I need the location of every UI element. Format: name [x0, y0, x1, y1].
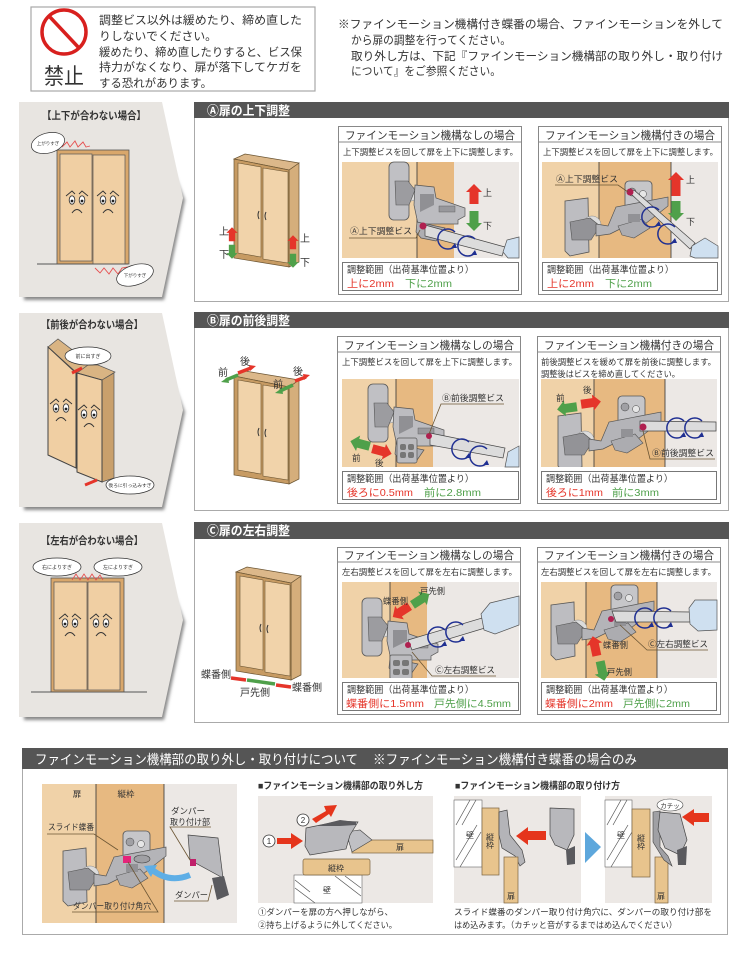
door illustration: 右によりすぎ — [42, 564, 72, 571]
hinge illustration: 前 — [352, 453, 361, 463]
removal caption: ②持ち上げるように外してください。 — [258, 920, 397, 930]
removal illustration: 1 — [267, 837, 272, 846]
range box — [542, 262, 718, 290]
door illustration: 上がりすぎ — [37, 140, 60, 147]
hinge overview illustration: スライド蝶番 — [48, 822, 94, 832]
hinge illustration: Ⓐ上下調整ビス — [350, 226, 412, 236]
hinge illustration: Ⓒ左右調整ビス — [435, 665, 495, 675]
sub-panel: with mechanism: ファインモーション機構付きの場合 — [544, 339, 714, 352]
sub-panel: with mechanism: ファインモーション機構付きの場合 — [545, 129, 715, 142]
warning text: する恐れがあります。 — [99, 76, 212, 90]
hinge illustration — [342, 162, 519, 258]
range box: 下に2mm — [405, 278, 452, 290]
attachment illustration 1 — [454, 796, 581, 903]
sub-panel: without mechanism — [337, 548, 521, 714]
attachment illustration 2: 扉 — [657, 892, 665, 901]
range box: 蝶番側に2mm — [545, 697, 613, 710]
hinge illustration: Ⓒ左右調整ビス — [648, 639, 708, 649]
panel: adjustment C — [194, 522, 729, 722]
hinge overview illustration: 取り付け部 — [170, 817, 210, 827]
attachment illustration 2: 縦枠 — [636, 833, 646, 851]
warning box — [31, 7, 315, 91]
warning text: 調整ビス以外は緩めたり、締め直した — [99, 13, 302, 27]
panel: removal and attachment — [22, 748, 728, 934]
removal subheading: ■ファインモーション機構部の取り外し方 — [258, 780, 423, 792]
warning text — [99, 13, 302, 90]
range box: 調整範囲（出荷基準位置より） — [546, 684, 673, 696]
door illustration: 下がりすぎ — [124, 272, 147, 279]
attachment illustration 1: 扉 — [507, 892, 515, 901]
attachment illustration 2: 壁 — [617, 830, 625, 840]
sub-panel: with mechanism — [538, 126, 722, 294]
range box: 後ろに1mm — [546, 486, 603, 499]
door illustration — [48, 339, 154, 494]
hinge illustration — [342, 379, 519, 468]
range box: 調整範囲（出荷基準位置より） — [546, 473, 673, 485]
attachment caption — [454, 907, 712, 930]
removal illustration — [258, 796, 433, 903]
range box: 蝶番側に1.5mm — [346, 697, 424, 710]
removal illustration: 扉 — [396, 843, 404, 852]
panel: adjustment B — [194, 312, 729, 510]
cabinet with arrows: 下 — [300, 258, 310, 269]
hinge overview illustration — [42, 784, 237, 923]
hinge illustration — [342, 582, 519, 679]
hinge illustration: 下 — [686, 217, 695, 227]
removal caption — [258, 907, 397, 930]
heading B: Ⓑ扉の前後調整 — [207, 313, 290, 328]
sub-panel: with mechanism — [537, 336, 721, 504]
hinge illustration: 下 — [483, 221, 492, 231]
sub-panel: with mechanism: 調整後はビスを締め直してください。 — [541, 369, 680, 379]
hinge illustration: 前 — [556, 393, 565, 403]
sub-panel: with mechanism: 前後調整ビスを緩めて扉を前後に調整します。 — [541, 357, 716, 367]
attachment illustration 1: 縦枠 — [486, 832, 494, 850]
sub-panel: without mechanism: ファインモーション機構なしの場合 — [345, 129, 515, 142]
sub-panel: without mechanism: 上下調整ビスを回して扉を上下に調整します。 — [342, 357, 517, 367]
hinge illustration — [541, 582, 717, 682]
hinge illustration: 戸先側 — [420, 586, 445, 596]
range box: 戸先側に4.5mm — [434, 697, 511, 710]
removal caption: ①ダンパーを扉の方へ押しながら、 — [258, 907, 393, 917]
cabinet with arrows: 前 — [273, 378, 283, 391]
cabinet with arrows — [218, 355, 310, 484]
range box: 調整範囲（出荷基準位置より） — [547, 264, 674, 276]
sub-panel: without mechanism: 左右調整ビスを回して扉を左右に調整します。 — [342, 567, 517, 577]
section heading: ※ファインモーション機構付き蝶番の場合のみ — [373, 752, 637, 767]
panel: depth misalignment — [19, 313, 185, 510]
sub-panel: without mechanism — [338, 126, 522, 294]
range box — [342, 472, 518, 500]
sub-panel: without mechanism: 上下調整ビスを回して扉を上下に調整します。 — [343, 147, 518, 157]
note text — [338, 17, 723, 78]
note text: から扉の調整を行ってください。 — [351, 33, 511, 47]
hinge illustration: 後 — [375, 458, 384, 468]
hinge illustration: Ⓑ前後調整ビス — [442, 393, 504, 403]
range box: 戸先側に2mm — [623, 697, 690, 710]
range box: 調整範囲（出荷基準位置より） — [347, 264, 474, 276]
door illustration: 前に出すぎ — [75, 353, 101, 360]
hinge illustration: 蝶番側 — [603, 640, 628, 650]
warning text: りしないでください。 — [99, 30, 217, 43]
attachment caption: スライド蝶番のダンパー取り付け角穴に、ダンパーの取り付け部を — [454, 907, 712, 917]
hinge overview illustration: ダンパー取り付け角穴 — [73, 901, 151, 911]
hinge illustration: 後 — [583, 385, 592, 395]
range box — [542, 472, 716, 500]
cabinet with arrows — [201, 567, 322, 699]
removal illustration: 2 — [301, 816, 306, 825]
range box: 前に3mm — [612, 486, 659, 499]
panel: adjustment A — [194, 102, 729, 302]
heading: 【左右が合わない場合】 — [41, 534, 143, 547]
note text: 取り外し方は、下記『ファインモーション機構部の取り外し・取り付け — [351, 49, 723, 63]
panel: vertical misalignment — [19, 102, 185, 300]
cabinet with arrows: 後 — [293, 365, 303, 378]
label: prohibited: 禁止 — [44, 64, 84, 89]
hinge illustration: Ⓐ上下調整ビス — [556, 174, 618, 184]
attachment subheading: ■ファインモーション機構部の取り付け方 — [455, 780, 620, 792]
cabinet with arrows: 上 — [219, 226, 229, 238]
cabinet with arrows: 戸先側 — [240, 686, 270, 699]
hinge illustration: 上 — [686, 175, 695, 185]
attachment caption: はめ込みます。（カチッと音がするまではめ込んでください） — [454, 920, 677, 930]
warning text: 持力がなくなり、扉が落下してケガを — [99, 60, 302, 74]
range box — [342, 262, 518, 290]
cabinet with arrows — [219, 154, 310, 269]
hinge overview illustration: 縦枠 — [117, 789, 135, 799]
cabinet with arrows: 蝶番側 — [201, 668, 231, 681]
hinge illustration — [542, 162, 718, 258]
door illustration: 後ろに引っ込みすぎ — [108, 482, 152, 489]
icon: prohibition sign — [42, 10, 86, 54]
cabinet with arrows: 前 — [218, 366, 228, 379]
range box: 上に2mm — [547, 278, 594, 290]
removal illustration: 縦枠 — [328, 863, 344, 873]
range box: 調整範囲（出荷基準位置より） — [347, 473, 474, 485]
sub-panel: without mechanism: ファインモーション機構なしの場合 — [344, 339, 514, 352]
door illustration — [31, 558, 147, 692]
range box: 上に2mm — [347, 278, 394, 290]
hinge overview illustration: ダンパー — [171, 806, 205, 816]
sub-panel: without mechanism: ファインモーション機構なしの場合 — [344, 549, 514, 562]
sub-panel: with mechanism — [537, 548, 721, 714]
cabinet with arrows: 後 — [240, 355, 250, 368]
note text: ※ファインモーション機構付き蝶番の場合、ファインモーションを外して — [338, 17, 723, 31]
attachment illustration 1: 壁 — [466, 830, 474, 840]
door illustration — [29, 129, 156, 290]
hinge overview illustration: ダンパー — [175, 890, 208, 900]
hinge illustration: 蝶番側 — [383, 596, 408, 606]
range box: 前に2.8mm — [424, 486, 481, 499]
door illustration: 左によりすぎ — [103, 564, 133, 571]
sub-panel: with mechanism: ファインモーション機構付きの場合 — [544, 549, 714, 562]
hinge illustration: 上 — [483, 188, 492, 198]
hinge illustration: 戸先側 — [607, 667, 632, 677]
section heading — [35, 752, 637, 767]
hinge illustration — [541, 379, 717, 471]
range box — [542, 682, 716, 710]
removal illustration: 壁 — [323, 885, 331, 895]
warning text: 緩めたり、締め直したりすると、ビス保 — [99, 45, 302, 59]
cabinet with arrows: 下 — [219, 250, 229, 261]
sub-panel: with mechanism: 上下調整ビスを回して扉を上下に調整します。 — [543, 147, 718, 157]
hinge overview illustration: 扉 — [73, 789, 81, 799]
hinge illustration: Ⓑ前後調整ビス — [652, 448, 714, 458]
range box: 後ろに0.5mm — [347, 486, 413, 499]
attachment illustration 2: カチッ — [660, 802, 680, 810]
attachment illustration 2 — [605, 796, 712, 903]
heading: 【前後が合わない場合】 — [41, 318, 143, 331]
note text: について』をご参照ください。 — [351, 64, 501, 78]
sub-panel: with mechanism: 左右調整ビスを回して扉を左右に調整します。 — [541, 567, 716, 577]
heading: 【上下が合わない場合】 — [42, 109, 146, 122]
cabinet with arrows: 上 — [300, 233, 310, 245]
panel: lateral misalignment — [19, 523, 185, 720]
section heading: ファインモーション機構部の取り外し・取り付けについて — [35, 752, 358, 767]
range box — [342, 682, 518, 710]
cabinet with arrows: 蝶番側 — [292, 681, 322, 694]
range box: 下に2mm — [605, 278, 652, 290]
sub-panel: without mechanism — [337, 336, 521, 504]
range box: 調整範囲（出荷基準位置より） — [347, 684, 474, 696]
heading C: Ⓒ扉の左右調整 — [207, 523, 290, 538]
icon: blue arrow — [585, 832, 601, 863]
heading A: Ⓐ扉の上下調整 — [207, 103, 290, 118]
